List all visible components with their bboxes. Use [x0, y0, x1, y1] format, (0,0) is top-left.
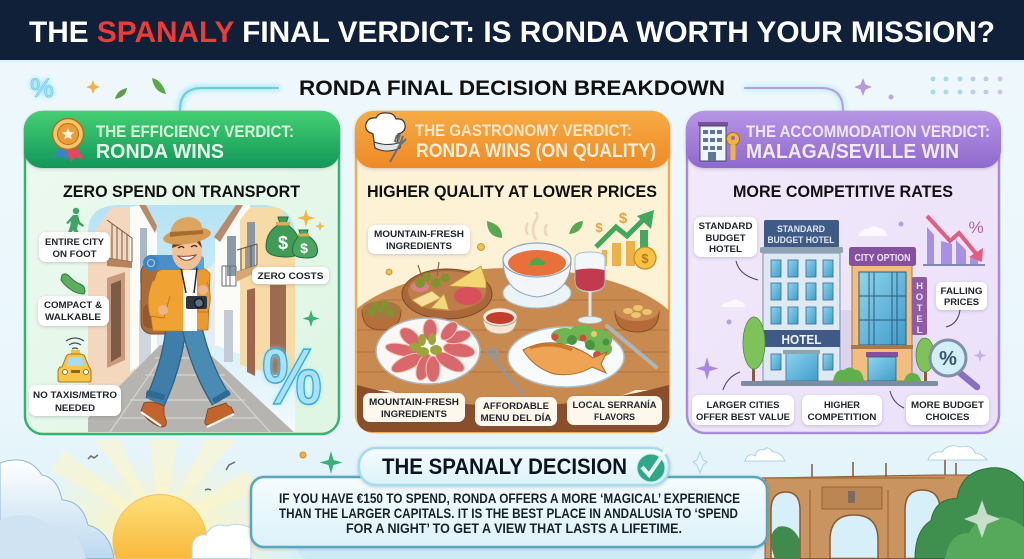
header: accommodation: MALAGA/SEVILLE WIN	[746, 141, 959, 163]
building: tall hotel: BUDGET HOTEL	[768, 235, 835, 246]
heading: competitive rates: MORE COMPETITIVE RATES	[733, 182, 953, 201]
icon: hotel with key	[698, 122, 740, 161]
icon: money bags	[266, 217, 318, 258]
ground	[741, 381, 938, 386]
label: compact and walkable	[38, 296, 109, 326]
decoration: top right sparkles and dots	[854, 76, 1002, 100]
callout leader lines	[723, 261, 960, 408]
icon: percent glow: %	[262, 332, 322, 421]
icon: money bags: $	[278, 233, 288, 253]
building: city option	[849, 247, 927, 381]
icon: magnifier percent: %	[939, 348, 957, 370]
decision text box	[251, 477, 767, 547]
panel: accommodation verdict	[686, 111, 1001, 433]
decision text box: IF YOU HAVE €150 TO SPEND, RONDA OFFERS A MORE ‘MAGICAL’ EXPERIENCE	[279, 490, 740, 506]
header: accommodation: THE ACCOMMODATION VERDICT:	[746, 123, 990, 141]
decision heading pill	[359, 447, 669, 485]
connector: left from subtitle to panel	[180, 88, 278, 110]
sparkles: money	[297, 209, 325, 231]
label: standard budget hotel: HOTEL	[709, 244, 742, 255]
header: gastronomy: THE GASTRONOMY VERDICT:	[415, 122, 632, 140]
icon: money bags: $	[300, 240, 308, 256]
panel: efficiency verdict	[24, 111, 340, 435]
header: gastronomy: RONDA WINS (ON QUALITY)	[416, 141, 656, 162]
decision text box: FOR A NIGHT’ TO GET A VIEW THAT LASTS A LIFETIME.	[346, 520, 682, 536]
icon: falling chart: %	[968, 218, 984, 237]
connector: right from subtitle to panel	[745, 88, 843, 110]
icon: falling chart	[923, 216, 985, 266]
icon: rising chart with coin: $	[595, 220, 603, 235]
icon: rising chart with coin: $	[619, 210, 628, 227]
label: entire city	[39, 232, 110, 262]
header: efficiency: RONDA WINS	[96, 141, 224, 163]
icon: rising chart with coin: $	[641, 251, 649, 266]
label: falling prices	[936, 282, 987, 310]
label: mountain-fresh top: INGREDIENTS	[386, 241, 452, 252]
label: entire city: ON FOOT	[52, 249, 97, 260]
building: city option: T	[917, 303, 923, 314]
label: standard budget hotel	[694, 217, 757, 257]
traveler figure	[141, 217, 234, 427]
label: affordable menu	[475, 397, 557, 426]
label: affordable menu: AFFORDABLE	[483, 401, 549, 412]
building: city option: H	[916, 281, 923, 292]
nuts bowl	[615, 301, 659, 332]
sauce bowl	[483, 308, 517, 334]
header: efficiency	[24, 111, 340, 168]
building: city option: E	[916, 314, 923, 325]
heading: higher quality: HIGHER QUALITY AT LOWER PRICES	[367, 182, 657, 201]
icon: rising chart with coin	[595, 210, 656, 269]
icon: check mark	[637, 447, 668, 482]
trees and bushes	[743, 317, 934, 382]
decoration: top left icons: %	[30, 73, 54, 103]
decision heading pill: THE SPANALY DECISION	[382, 454, 627, 479]
icon: magnifier percent	[930, 340, 977, 387]
olive bowl	[362, 300, 401, 330]
icon: percent glow: %	[262, 332, 322, 421]
header: gastronomy	[355, 111, 670, 168]
tapas plate	[402, 262, 492, 319]
clouds and sparkles	[696, 222, 986, 380]
icon: chef hat and fork	[366, 113, 406, 162]
label: mountain-fresh bottom: MOUNTAIN-FRESH	[369, 397, 459, 408]
leaves and dots	[386, 221, 583, 275]
label: higher competition	[802, 395, 882, 425]
label: mountain-fresh top: MOUNTAIN-FRESH	[374, 229, 464, 240]
label: standard budget hotel: BUDGET	[706, 233, 746, 244]
label: no taxis: NO TAXIS/METRO	[33, 390, 117, 401]
label: no taxis: NEEDED	[55, 403, 95, 414]
heading: zero spend: ZERO SPEND ON TRANSPORT	[63, 182, 301, 201]
label: compact and walkable: COMPACT &	[44, 300, 102, 311]
label: zero costs	[252, 267, 329, 284]
title banner	[0, 0, 1024, 63]
label: local serrania: LOCAL SERRANÍA	[572, 400, 657, 411]
scene: sun and clouds	[0, 438, 707, 559]
building: city option: O	[916, 292, 923, 303]
decoration: top left icons: %	[30, 73, 54, 103]
icon: medal ribbon	[52, 118, 84, 162]
building: city option: CITY OPTION	[854, 252, 910, 264]
building: tall hotel	[760, 220, 843, 381]
decision text box: THAN THE LARGER CAPITALS. IT IS THE BEST PLACE IN ANDALUSIA TO ‘SPEND	[279, 505, 738, 521]
decoration: top left icons	[30, 73, 166, 103]
knife	[607, 326, 656, 367]
label: compact and walkable: WALKABLE	[45, 312, 101, 323]
label: mountain-fresh bottom	[363, 393, 465, 422]
sparkle: green	[302, 310, 320, 327]
panel: gastronomy verdict	[340, 111, 684, 435]
header: efficiency: THE EFFICIENCY VERDICT:	[96, 123, 294, 141]
building: city option: L	[917, 325, 923, 336]
table illustration	[357, 268, 669, 432]
label: more budget choices	[906, 395, 989, 425]
label: local serrania: FLAVORS	[594, 412, 635, 423]
icon: walking person	[66, 208, 84, 236]
label: falling prices: FALLING	[940, 286, 982, 297]
label: higher competition: COMPETITION	[808, 412, 877, 423]
label: larger cities: OFFER BEST VALUE	[696, 412, 790, 423]
street scene illustration	[72, 205, 297, 435]
label: mountain-fresh bottom: INGREDIENTS	[381, 409, 447, 420]
label: affordable menu: MENU DEL DÍA	[480, 413, 552, 424]
label: local serrania	[567, 396, 662, 425]
ham plate	[376, 318, 480, 384]
label: mountain-fresh top	[368, 225, 470, 254]
building: tall hotel: STANDARD	[777, 224, 825, 235]
fish plate	[508, 325, 624, 387]
header: accommodation	[686, 111, 1001, 168]
label: falling prices: PRICES	[944, 297, 979, 308]
label: standard budget hotel: STANDARD	[698, 221, 753, 232]
icon: shoe	[61, 274, 85, 294]
decision cloud base	[297, 535, 757, 559]
label: higher competition: HIGHER	[824, 400, 860, 411]
wine glass	[575, 252, 605, 324]
title banner: THE SPANALY FINAL VERDICT: IS RONDA WORTH YOUR MISSION?	[29, 16, 995, 49]
subtitle: RONDA FINAL DECISION BREAKDOWN	[299, 77, 725, 100]
label: larger cities	[692, 395, 794, 425]
fork	[486, 347, 524, 395]
label: larger cities: LARGER CITIES	[706, 400, 780, 411]
steam	[526, 212, 547, 240]
label: entire city: ENTIRE CITY	[45, 237, 105, 248]
label: more budget choices: MORE BUDGET	[911, 400, 984, 411]
label: more budget choices: CHOICES	[926, 412, 970, 423]
soup bowl	[503, 243, 571, 308]
icon: taxi with signal	[58, 338, 91, 382]
label: zero costs: ZERO COSTS	[258, 271, 324, 282]
label: no taxis	[29, 385, 121, 416]
scene: bridge and trees	[745, 446, 1024, 559]
building: tall hotel: HOTEL	[782, 332, 822, 347]
